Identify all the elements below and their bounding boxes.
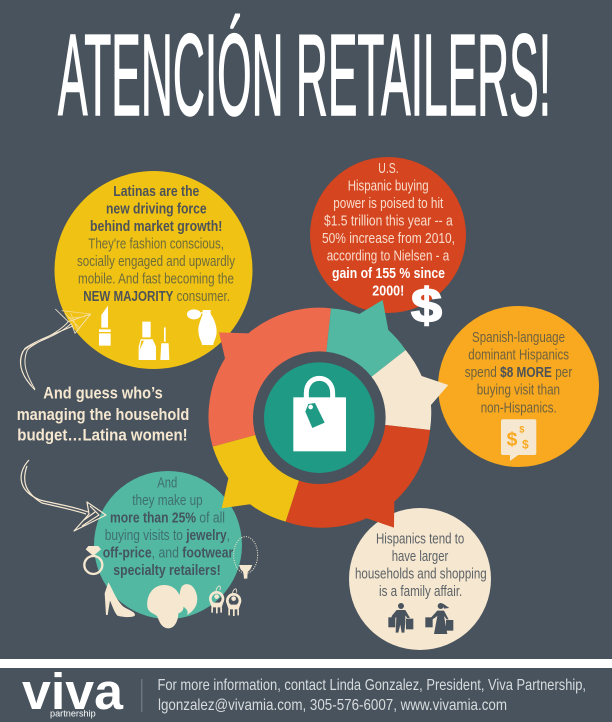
panel: latina budget callout: And guess who’s (43, 384, 163, 402)
white divider band (0, 659, 612, 668)
text block: buying power: 50% increase from 2010, (322, 231, 455, 247)
icon: speech bubble with dollars: $ (522, 437, 529, 451)
text block: jewelry: And (157, 476, 177, 492)
text block: buying power: U.S. (378, 161, 399, 177)
text block: jewelry: off-price, and footwear (103, 546, 234, 562)
segment: cream (319, 350, 448, 430)
text block: latinas (77, 184, 236, 305)
panel: teal jewelry and footwear (84, 471, 258, 628)
panel: central shopping wheel (208, 300, 448, 528)
panel: latina budget callout: budget…Latina women! (17, 426, 188, 444)
segment: teal (319, 300, 406, 418)
icon: speech bubble with dollars: $ (519, 425, 525, 435)
text block: buying power: power is poised to hit (333, 196, 443, 212)
text block: households: have larger (392, 549, 448, 565)
panel: hispanic buying power (310, 157, 466, 313)
segment: coral (208, 308, 331, 447)
icons: shoppers (388, 603, 453, 634)
icon: speech bubble with dollars (501, 419, 536, 461)
text block: spending: Spanish-language (472, 330, 565, 346)
text block: jewelry: buying visits to jewelry, (105, 528, 230, 544)
text block: buying power: Hispanic buying (348, 178, 429, 194)
panel: spanish-language spending (438, 306, 599, 467)
text block: latinas: behind market growth! (90, 219, 222, 235)
text block: jewelry (103, 476, 234, 579)
segment: red (286, 418, 430, 528)
text block: households: is a family affair. (379, 584, 462, 600)
text block: buying power: according to Nielsen - a (327, 248, 450, 264)
text block: spending: buying visit than (477, 382, 560, 398)
footer (22, 663, 586, 720)
text block: households (355, 532, 487, 600)
text block: spending: non-Hispanics. (481, 400, 557, 416)
text block: latinas: Latinas are the (113, 184, 199, 200)
text block: buying power: 2000! (372, 284, 404, 300)
icon: dollar sign: $ (411, 280, 442, 333)
contact text (158, 677, 586, 714)
text block: spending (465, 330, 572, 416)
text block: jewelry: they make up (132, 493, 203, 509)
icons: jewelry, heel, head (84, 537, 258, 628)
logo: viva partnership: partnership (50, 708, 96, 720)
text block: buying power: gain of 155 % since (332, 266, 445, 282)
panel: hispanic households (349, 508, 491, 650)
text block: latinas: socially engaged and upwardly (77, 254, 236, 270)
text block: households: Hispanics tend to (376, 532, 464, 548)
panel: latina budget callout (17, 384, 189, 444)
text block: latinas: They're fashion conscious, (88, 236, 224, 252)
text block: spending: dominant Hispanics (468, 348, 569, 364)
text block: latinas: new driving force (106, 202, 207, 218)
panel: latina budget callout: managing the household (17, 406, 189, 424)
text block: latinas: mobile. And fast becoming the (78, 272, 234, 288)
arrow: sketch to latinas circle (20, 309, 91, 390)
text block: buying power: $1.5 trillion this year -- a (324, 214, 453, 230)
text block: latinas: NEW MAJORITY consumer. (83, 289, 230, 305)
arrow: sketch to teal circle (21, 460, 106, 531)
segment: yellow (213, 418, 319, 522)
icon: shopping bag with tag (293, 378, 346, 451)
contact text: lgonzalez@vivamia.com, 305-576-6007, www.vivamia.com (158, 697, 507, 714)
text block: jewelry: specialty retailers! (113, 563, 221, 579)
text block: households: households and shopping (355, 566, 487, 582)
icon: speech bubble with dollars: $ (507, 429, 518, 450)
panel: latinas market growth (54, 171, 252, 369)
logo: viva partnership: viva (22, 663, 124, 720)
icons: cosmetics (99, 306, 217, 360)
text block: jewelry: more than 25% of all (110, 510, 225, 526)
text block: spending: spend $8 MORE per (465, 365, 572, 381)
text block: buying power (322, 161, 455, 300)
